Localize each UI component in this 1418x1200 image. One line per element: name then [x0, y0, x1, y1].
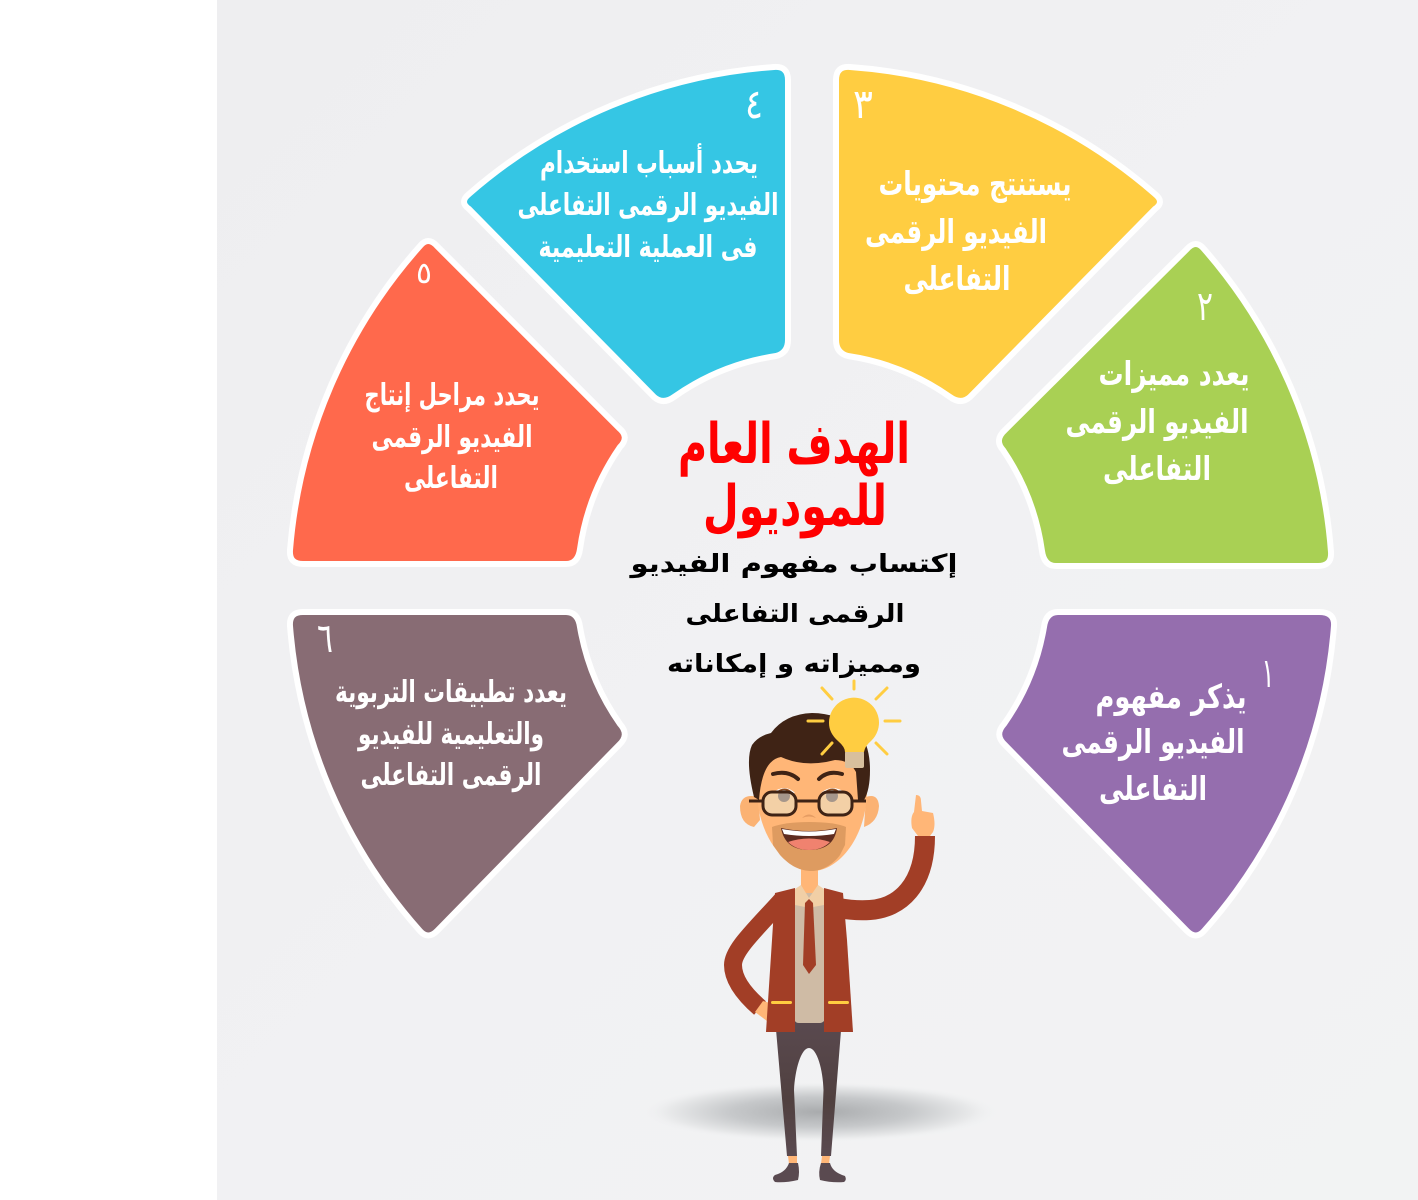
number 6: ٦ [317, 614, 333, 662]
line 2: الفيديو الرقمى التفاعلى [518, 188, 778, 223]
right lens [819, 792, 852, 815]
ears [740, 796, 879, 827]
iris tops [776, 788, 840, 792]
goal line 2: الرقمى التفاعلى [686, 599, 904, 629]
line 2: الفيديو الرقمى [372, 420, 532, 455]
left pupil [778, 790, 790, 802]
pocket right [828, 1001, 849, 1004]
bulb base [845, 751, 864, 768]
face [757, 757, 867, 871]
panel 3: yellow segment [836, 67, 1160, 401]
line 1: يستنتج محتويات [878, 164, 1072, 204]
left arm [733, 900, 782, 1008]
panel 2: green segment [999, 244, 1331, 566]
glasses frame [749, 792, 866, 815]
neck [795, 860, 824, 900]
number 1: ١ [1262, 649, 1274, 697]
left hand [755, 1001, 770, 1021]
left frame [763, 792, 796, 815]
line 3: فى العملية التعليمية [538, 230, 758, 265]
mouth [781, 828, 837, 850]
line 2: الفيديو الرقمى [865, 212, 1047, 252]
pocket left [771, 1001, 792, 1004]
icon: light bulb [808, 681, 900, 768]
number 2: ٢ [1197, 282, 1213, 330]
title line 2: للموديول [703, 474, 887, 539]
panel 6: brown segment [290, 612, 625, 936]
ankles [788, 1156, 830, 1164]
eyebrows [773, 773, 842, 779]
green petal shape [999, 244, 1331, 566]
hair [749, 713, 870, 800]
orange segment text [364, 378, 540, 496]
yellow segment text [865, 164, 1072, 298]
tongue [788, 838, 830, 850]
central heading [678, 412, 910, 539]
line 1: يحدد أسباب استخدام [540, 143, 758, 181]
line 1: يحدد مراحل إنتاج [364, 378, 540, 413]
pupils [776, 788, 840, 802]
line 1: يعدد مميزات [1098, 354, 1250, 394]
yellow petal shape [836, 67, 1160, 401]
brown segment text [335, 675, 567, 793]
panel 4: blue segment [464, 67, 788, 401]
number 4: ٤ [745, 80, 763, 128]
shoes [773, 1163, 846, 1182]
character: man with idea [733, 713, 934, 1182]
left lens [763, 792, 796, 815]
right pupil [826, 790, 838, 802]
beard [772, 822, 846, 871]
line 3: التفاعلى [1103, 449, 1211, 488]
panel 5: orange segment [290, 241, 625, 564]
right frame [819, 792, 852, 815]
jacket right [824, 888, 853, 1032]
goal line 3: ومميزاته و إمكاناته [667, 649, 921, 679]
line 3: التفاعلى [1099, 769, 1207, 808]
line 3: الرقمى التفاعلى [360, 758, 542, 793]
purple segment text [1062, 677, 1246, 808]
green segment text [1066, 354, 1250, 488]
central goal text [628, 549, 958, 679]
teeth [782, 829, 836, 836]
purple petal shape [999, 612, 1334, 936]
nose [802, 814, 816, 818]
collar [795, 885, 824, 907]
line 2: الفيديو الرقمى [1062, 722, 1244, 762]
glasses lens fill [763, 792, 852, 815]
line 3: التفاعلى [904, 259, 1010, 298]
blue petal shape [464, 67, 788, 401]
line 1: يعدد تطبيقات التربوية [335, 675, 567, 710]
legs [775, 1018, 842, 1156]
number 3: ٣ [853, 80, 873, 128]
right arm [838, 836, 925, 910]
line 2: والتعليمية للفيديو [357, 717, 544, 752]
tie [803, 899, 816, 974]
brown petal shape [290, 612, 625, 936]
ground shadow [642, 1082, 998, 1142]
jacket left [766, 888, 795, 1032]
bulb glass [829, 698, 879, 752]
shirt [795, 893, 824, 1023]
line 1: يذكر مفهوم [1096, 677, 1246, 717]
panel 1: purple segment [999, 612, 1334, 936]
number 5: ٥ [416, 256, 432, 291]
frame arms and bridge [749, 800, 866, 802]
blue segment text [518, 143, 778, 265]
title line 1: الهدف العام [678, 412, 910, 477]
bulb rays [808, 681, 900, 754]
orange petal shape [290, 241, 625, 564]
line 3: التفاعلى [404, 461, 498, 496]
right hand [911, 795, 934, 836]
line 2: الفيديو الرقمى [1066, 402, 1248, 442]
eye whites [772, 788, 846, 793]
goal line 1: إكتساب مفهوم الفيديو [628, 549, 958, 579]
